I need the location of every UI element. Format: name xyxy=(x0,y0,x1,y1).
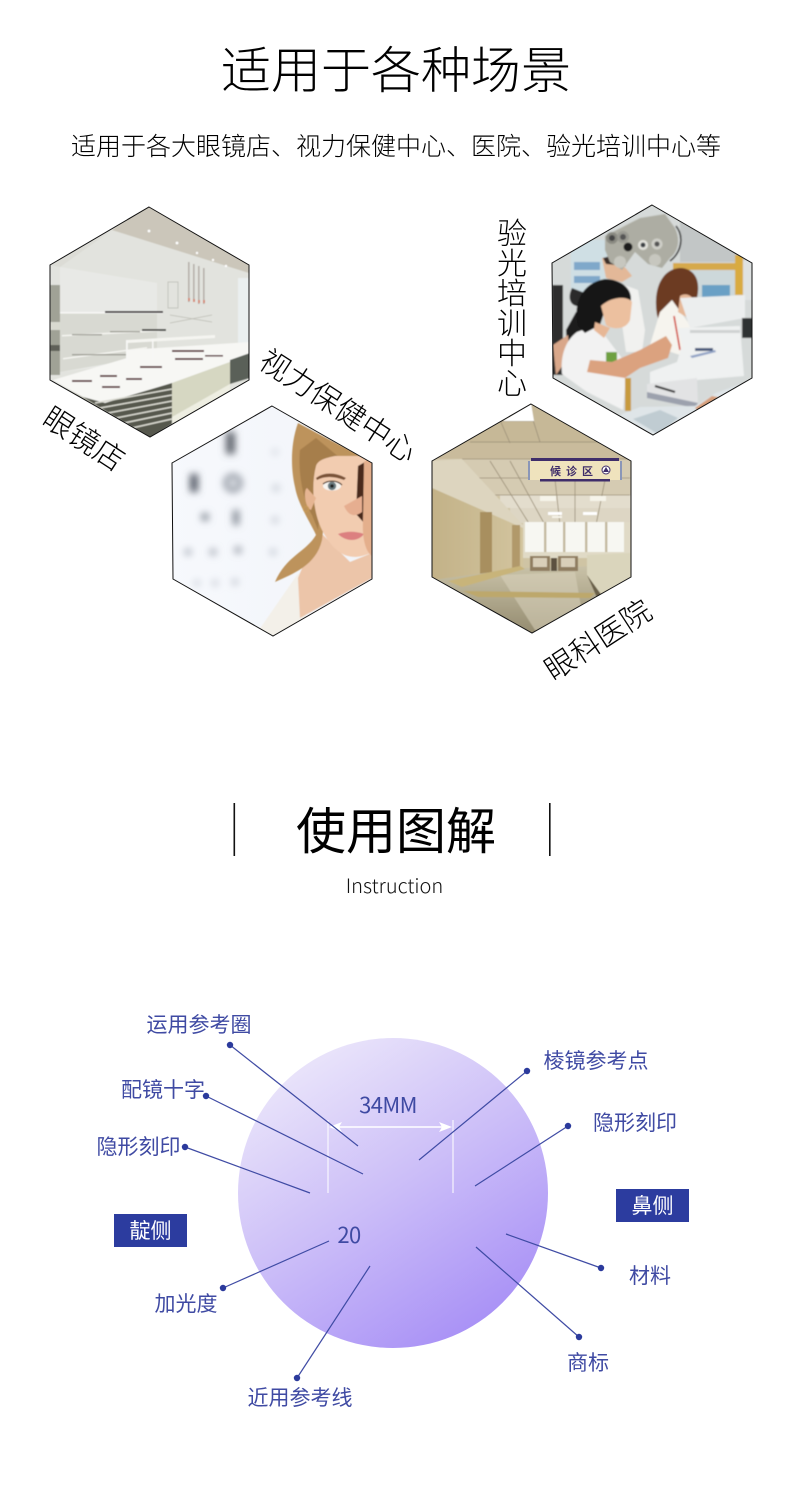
callout: 商标 xyxy=(476,1247,609,1377)
shop counter xyxy=(53,342,250,403)
callout: 商标: 商标 xyxy=(567,1347,609,1377)
label: eye hospital: 眼科医院 xyxy=(534,587,659,689)
callout: 近用参考线 xyxy=(248,1266,370,1412)
title: 适用于各种场景 xyxy=(221,31,571,103)
photo: hospital corridor hexagon: 候诊区 xyxy=(550,463,598,479)
label: optometry training center: 光 xyxy=(497,239,527,283)
photo: eyewear store hexagon xyxy=(45,200,255,440)
callout: 近用参考线: 近用参考线 xyxy=(248,1382,352,1412)
dimension: 34MM: 34MM xyxy=(359,1088,417,1120)
callout: 棱镜参考点: 棱镜参考点 xyxy=(544,1045,648,1075)
photo: optometry training hexagon xyxy=(545,200,760,440)
value: 20: 20 xyxy=(337,1218,361,1250)
callout: 配镜十字: 配镜十字 xyxy=(121,1074,205,1104)
label: optometry training center: 培 xyxy=(497,269,527,313)
photo: eye chart and woman hexagon xyxy=(165,400,380,640)
right woman xyxy=(655,267,700,318)
callout: 加光度 xyxy=(154,1241,329,1318)
label: optometry training center: 中 xyxy=(497,329,527,373)
callout: 隐形刻印 left: 隐形刻印 xyxy=(96,1131,180,1161)
dimension: 34MM xyxy=(328,1088,453,1193)
callout: 运用参考圈 xyxy=(146,1009,358,1146)
callout: 运用参考圈: 运用参考圈 xyxy=(146,1009,252,1039)
back person xyxy=(622,286,646,352)
tag: nasal side: 鼻侧 xyxy=(632,1190,674,1220)
label: optometry training center: 验 xyxy=(497,209,527,253)
callout: 材料 xyxy=(506,1234,671,1290)
callout: 隐形刻印 right: 隐形刻印 xyxy=(593,1107,677,1137)
lens diagram xyxy=(96,1009,689,1412)
callout: 隐形刻印 right xyxy=(475,1107,677,1186)
callout: 隐形刻印 left xyxy=(96,1131,310,1193)
phoropter xyxy=(605,214,678,270)
label: optometry training center: 训 xyxy=(497,299,527,343)
label: vision care center: 视力保健中心 xyxy=(252,336,427,471)
callout: 材料: 材料 xyxy=(629,1260,671,1290)
label: optometry training center: 心 xyxy=(497,359,527,403)
lens circle xyxy=(238,1038,548,1348)
callout: 加光度: 加光度 xyxy=(154,1288,218,1318)
tag: nasal side xyxy=(616,1189,689,1222)
heading: usage diagram: 使用图解 xyxy=(296,792,496,864)
autorefractor machine xyxy=(680,295,745,328)
subheading: Instruction: Instruction xyxy=(346,870,443,899)
callout: 棱镜参考点 xyxy=(419,1045,648,1160)
tag: temple side: 靛侧 xyxy=(130,1215,172,1245)
tag: temple side xyxy=(114,1214,187,1247)
front woman shirt xyxy=(562,325,627,410)
photo: hospital corridor hexagon xyxy=(432,403,632,634)
label: eyewear store: 眼镜店 xyxy=(36,394,135,480)
callout: 配镜十字 xyxy=(121,1074,363,1174)
subtitle: 适用于各大眼镜店、视力保健中心、医院、验光培训中心等 xyxy=(71,127,721,163)
